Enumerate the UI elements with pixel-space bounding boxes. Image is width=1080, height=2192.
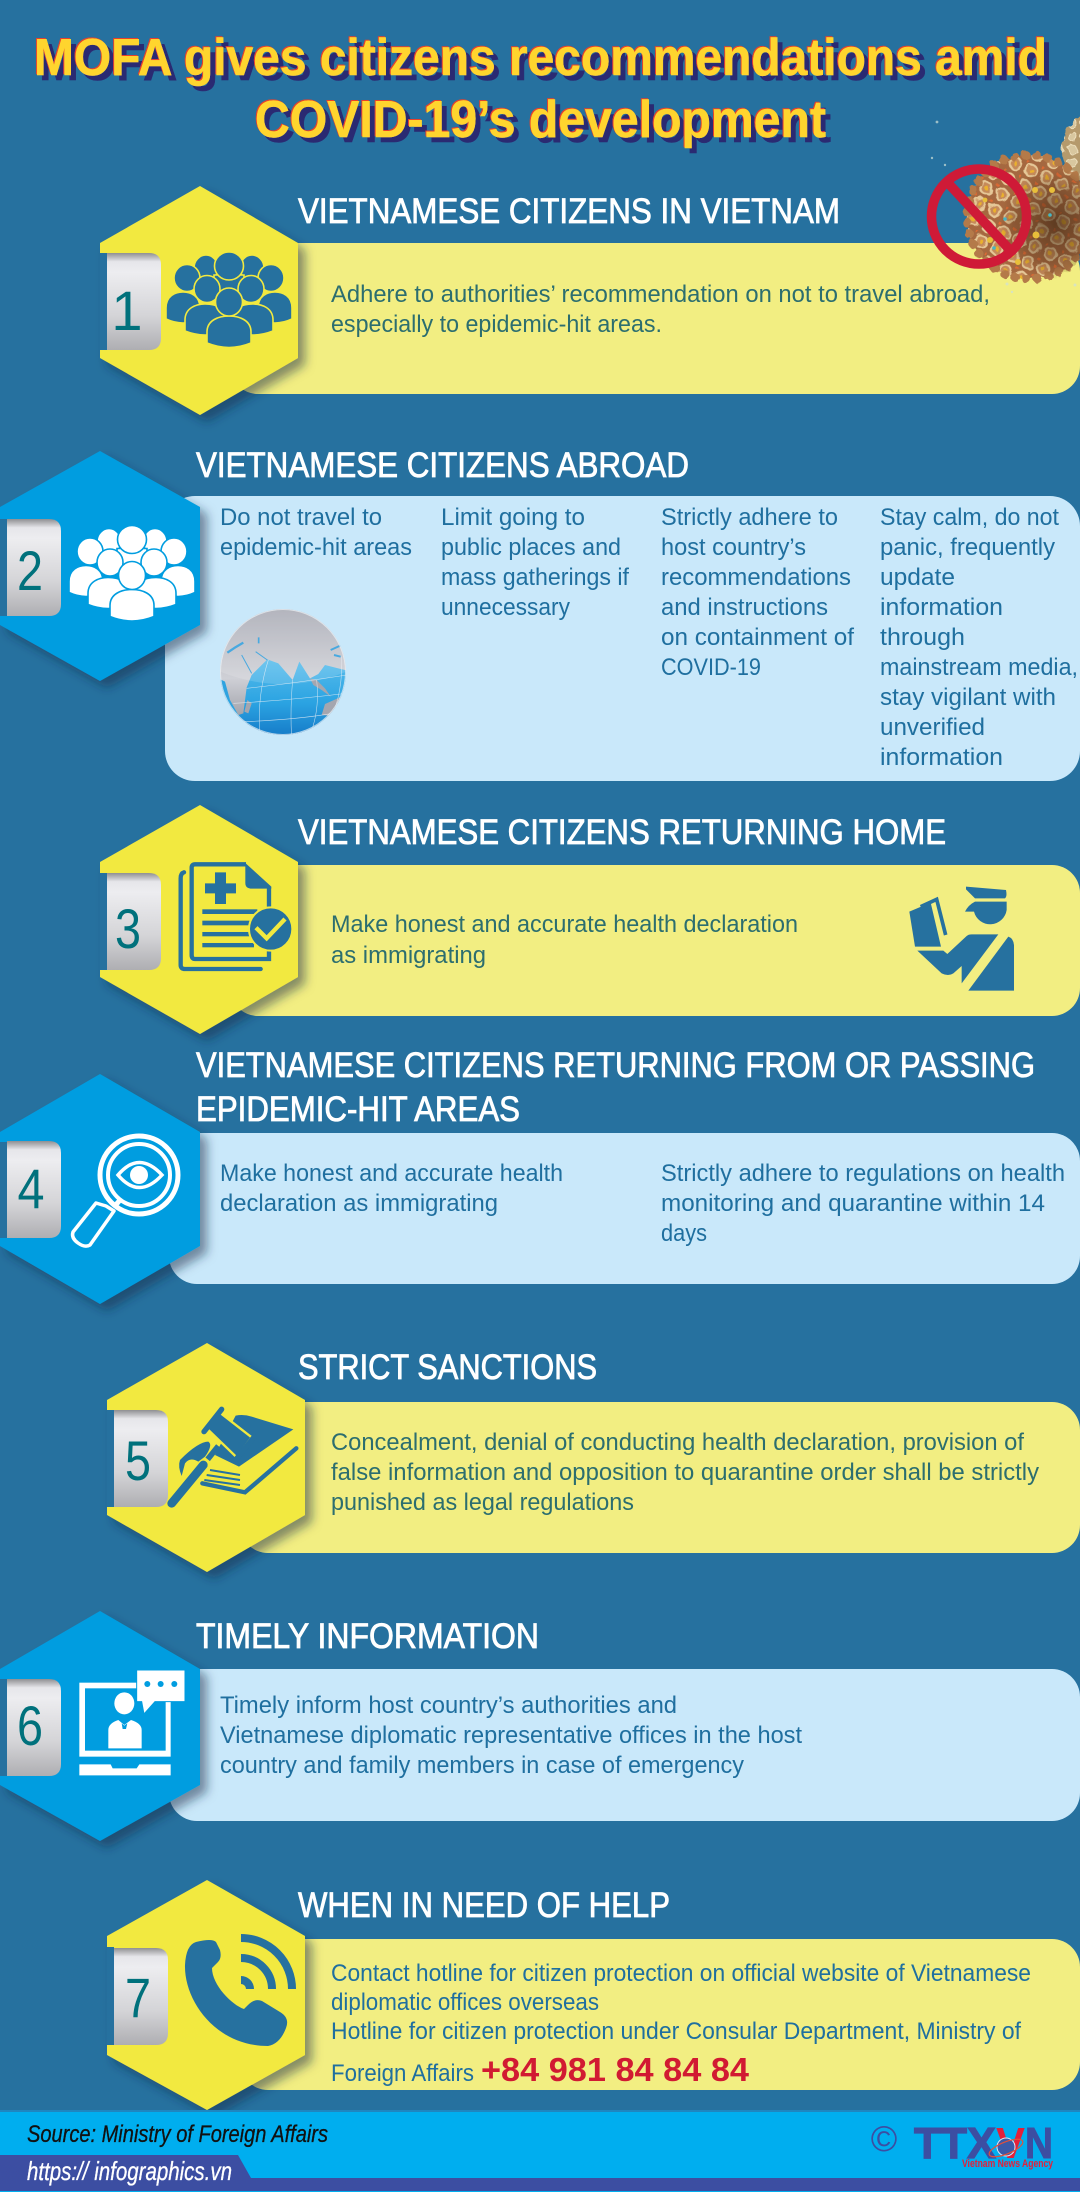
hexagon badge 2 (0, 451, 200, 681)
footer strip (0, 2155, 1080, 2191)
heading 1: VIETNAMESE CITIZENS IN VIETNAM (298, 192, 840, 231)
number tab 3: 3 (115, 897, 141, 960)
icon: globe (220, 609, 346, 735)
column 2 text: mass gatherings if (441, 564, 629, 591)
text 4 left: Make honest and accurate health (220, 1160, 563, 1187)
text 1: Adhere to authorities’ recommendation on not to travel abroad, (331, 281, 990, 308)
column 1 text (220, 504, 412, 561)
number tab 3 (100, 873, 161, 970)
heading 4 (196, 1046, 1035, 1129)
text 7: Hotline for citizen protection under Consular Department, Ministry of (331, 2018, 1021, 2045)
text 4 right: Strictly adhere to regulations on health (661, 1160, 1065, 1187)
column 4 text: panic, frequently (880, 534, 1055, 561)
column 4 text: Stay calm, do not (880, 504, 1059, 531)
number tab 5 (107, 1410, 168, 1507)
number tab 5: 5 (125, 1429, 151, 1492)
text 3: Make honest and accurate health declaration (331, 911, 798, 938)
number tab 2 (0, 519, 61, 616)
column 1 text: Do not travel to (220, 504, 382, 531)
column 2 text: unnecessary (441, 594, 570, 621)
column 3 text (661, 504, 854, 681)
section 1: citizens in Vietnam (100, 110, 1080, 415)
column 4 text (880, 504, 1078, 771)
heading 7: WHEN IN NEED OF HELP (298, 1886, 670, 1925)
text 7: diplomatic offices overseas (331, 1989, 599, 2016)
section 4: returning from epidemic-hit areas (0, 1046, 1080, 1304)
column 3 text: host country’s (661, 534, 806, 561)
text 4 right: days (661, 1220, 707, 1247)
section 2: citizens abroad (0, 446, 1080, 781)
icon: people (166, 252, 292, 348)
logo TTXVN: V (996, 2119, 1026, 2168)
text 5 (331, 1429, 1039, 1516)
panel 2 (165, 496, 1080, 781)
number tab 6 (0, 1679, 61, 1776)
column 4 text: mainstream media, (880, 654, 1078, 681)
text 7: Contact hotline for citizen protection on official website of Vietnamese (331, 1960, 1031, 1987)
text 4 right (661, 1160, 1065, 1247)
text 5: false information and opposition to quarantine order shall be strictly (331, 1459, 1039, 1486)
text 7: Foreign Affairs (331, 2060, 474, 2087)
panel 7 (240, 1939, 1080, 2090)
logo TTXVN: N (1025, 2119, 1053, 2168)
text 4 left: declaration as immigrating (220, 1190, 498, 1217)
panel 5 (240, 1402, 1080, 1553)
text 5: Concealment, denial of conducting health declaration, provision of (331, 1429, 1024, 1456)
heading 5: STRICT SANCTIONS (298, 1348, 597, 1387)
text 3: as immigrating (331, 942, 486, 969)
column 4 text: information (880, 744, 1003, 771)
column 4 text: information (880, 594, 1003, 621)
hexagon badge 7 (107, 1880, 305, 2110)
text 7 (331, 1960, 1031, 2087)
column 3 text: on containment of (661, 624, 854, 651)
title (34, 29, 1047, 149)
heading 2: VIETNAMESE CITIZENS ABROAD (196, 446, 689, 485)
section 3: returning home (100, 805, 1080, 1034)
number tab 4: 4 (18, 1157, 44, 1220)
number tab 1: 1 (111, 279, 143, 342)
title: COVID-19’s development (255, 91, 826, 149)
panel 3 (230, 865, 1080, 1016)
text 3 (331, 911, 798, 969)
column 2 text: public places and (441, 534, 621, 561)
section 7: when in need of help (107, 1880, 1080, 2110)
column 4 text: unverified (880, 714, 985, 741)
text 5: punished as legal regulations (331, 1489, 634, 1516)
column 3 text: recommendations (661, 564, 851, 591)
number tab 4 (0, 1141, 61, 1238)
text 4 right: monitoring and quarantine within 14 (661, 1190, 1045, 1217)
text 1: especially to epidemic-hit areas. (331, 311, 662, 338)
heading 3: VIETNAMESE CITIZENS RETURNING HOME (298, 813, 946, 852)
column 1 text: epidemic-hit areas (220, 534, 412, 561)
logo TTXVN: © (871, 2118, 897, 2159)
column 3 text: COVID-19 (661, 654, 761, 681)
logo TTXVN: TTX (914, 2119, 996, 2168)
logo TTXVN: Vietnam News Agency (962, 2158, 1054, 2170)
icon: video call monitor (79, 1670, 185, 1775)
number tab 7 (107, 1947, 168, 2045)
column 2 text (441, 504, 629, 621)
text 6: Vietnamese diplomatic representative offices in the host (220, 1722, 802, 1749)
hexagon badge 4 (0, 1074, 200, 1304)
hexagon badge 3 (100, 805, 298, 1034)
panel 6 (169, 1669, 1080, 1821)
source: Source: Ministry of Foreign Affairs (27, 2121, 328, 2148)
column 2 text: Limit going to (441, 504, 585, 531)
icon: people white (69, 526, 195, 621)
icon: medical declaration document (181, 863, 292, 969)
heading 6: TIMELY INFORMATION (196, 1617, 539, 1656)
text 4 left (220, 1160, 563, 1217)
hexagon badge 6 (0, 1611, 200, 1841)
hexagon badge 1 (100, 186, 298, 415)
hexagon badge 5 (107, 1343, 305, 1572)
column 4 text: update (880, 564, 955, 591)
icon: magnifier with eye (73, 1136, 178, 1246)
footer band (0, 2110, 1080, 2192)
panel 4 (169, 1133, 1080, 1284)
text 1 (331, 281, 990, 338)
hotline number: +84 981 84 84 84 (481, 2051, 750, 2088)
icon: phone with signal (185, 1938, 292, 2046)
text 6: Timely inform host country’s authorities and (220, 1692, 677, 1719)
number tab 1 (100, 253, 161, 350)
text 6: country and family members in case of emergency (220, 1752, 744, 1779)
number tab 7: 7 (125, 1966, 151, 2029)
column 3 text: Strictly adhere to (661, 504, 838, 531)
column 3 text: and instructions (661, 594, 828, 621)
column 4 text: through (880, 624, 965, 651)
icon: immigration officer (909, 887, 1014, 991)
website: https:// infographics.vn (27, 2156, 232, 2186)
icon: gavel and book (172, 1409, 296, 1503)
section 5: strict sanctions (107, 1343, 1080, 1572)
logo TTXVN (871, 2118, 1054, 2170)
section 6: timely information (0, 1611, 1080, 1841)
heading 4: EPIDEMIC-HIT AREAS (196, 1090, 520, 1129)
number tab 6: 6 (17, 1694, 43, 1757)
icon: virus with prohibition sign (931, 110, 1080, 301)
number tab 2: 2 (17, 539, 43, 602)
panel 1 (230, 243, 1080, 394)
text 6 (220, 1692, 802, 1779)
column 4 text: stay vigilant with (880, 684, 1056, 711)
